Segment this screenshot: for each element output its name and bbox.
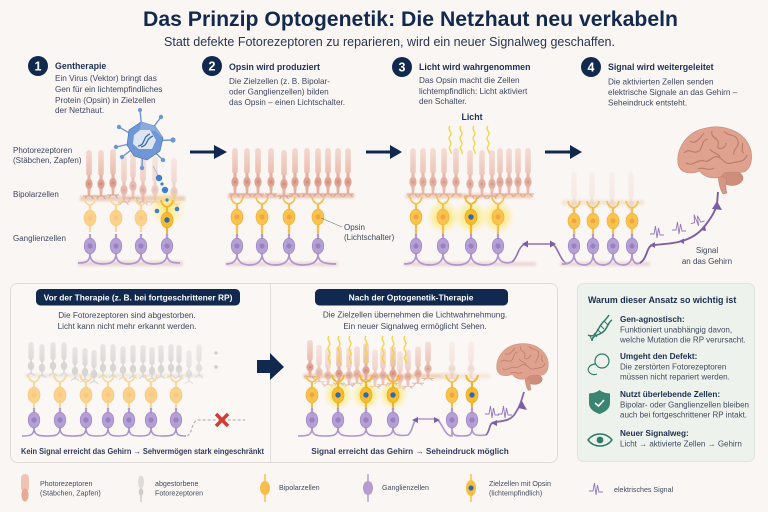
layer labels: Photorezeptoren [13,146,72,155]
retina illustration after therapy [298,340,490,436]
item text: Funktioniert unabhängig davon, [620,326,732,334]
legend: bipolar cells: Bipolarzellen [279,484,320,492]
item text: Bipolar- oder Ganglienzellen bleiben [620,400,749,410]
after heading badge: Nach der Optogenetik-Therapie [349,292,474,302]
step 1 text: Ein Virus (Vektor) bringt das [55,74,157,83]
layer labels: Bipolarzellen [13,190,59,199]
before text: Licht kann nicht mehr erkannt werden. [58,322,196,331]
icon: red cross [216,414,228,426]
step 1 text: Gen für ein lichtempfindliches [55,85,162,94]
step 2 text: oder Ganglienzellen) bilden [229,88,329,96]
opsin callout: Opsin [344,223,365,232]
icon: brain after [497,344,548,390]
number badge 3 [392,57,412,77]
retina illustration step 3 [404,148,536,266]
step 1 text: Protein (Opsin) in Zielzellen [55,96,156,105]
step 3 heading: Licht wird wahrgenommen [419,62,530,72]
panel: why this approach matters [578,284,754,462]
number badge 2 [202,56,222,76]
before heading badge: Vor der Therapie (z. B. bei fortgeschrittener RP) [44,292,233,302]
number badge 2: 2 [209,60,216,74]
icon: virus vector [114,108,176,170]
step 1 text: der Netzhaut. [55,106,104,115]
legend: ganglion cells: Ganglienzellen [382,484,429,492]
step 4 text: Die aktivierten Zellen senden [608,78,714,86]
light rays after [328,336,406,364]
step 2 text: das Opsin – einen Lichtschalter. [229,98,345,107]
after text: Ein neuer Signalweg ermöglicht Sehen. [343,322,487,331]
icon: brain [678,127,752,194]
legend: bipolar cells [260,474,320,502]
arrow before to after [257,353,284,380]
panel: before therapy [21,289,264,456]
signal arrow to brain [640,192,722,263]
step 1 heading: Gentherapie [55,61,106,71]
layer labels: (Stäbchen, Zapfen) [13,156,82,165]
retina illustration step 4 [560,172,650,266]
retina illustration before therapy [22,342,218,436]
legend: ganglion cells [363,474,429,502]
legend: target cells with opsin: Zielzellen mit Opsin [489,480,551,488]
item text: Gen-agnostisch: [620,315,685,324]
step 3 text [419,76,528,106]
before text: Die Fotorezeptoren sind abgestorben. [58,311,196,320]
light rays [449,126,489,154]
before text [58,311,196,331]
signal label: an das Gehirn [682,257,732,266]
number badge 1 [28,56,48,76]
item text [620,352,730,382]
number badge 3: 3 [399,60,406,74]
item text [620,429,742,448]
legend: dead photoreceptors [138,476,203,502]
item text: Neuer Signalweg: [620,429,689,438]
after heading badge [315,289,508,306]
electrical signals [650,212,705,238]
blocked signal line [187,420,245,436]
legend: photoreceptors: (Stäbchen, Zapfen) [40,490,101,498]
step 4 text: Seheindruck entsteht. [608,98,687,108]
step 2 text: Die Zielzellen (z. B. Bipolar- [229,77,330,86]
panel heading: Warum dieser Ansatz so wichtig ist [588,295,736,305]
item text: Die zerstörten Fotorezeptoren [620,362,726,372]
item text: Licht → aktivierte Zellen → Gehirn [620,440,742,448]
retina illustration step 2 [226,148,354,266]
number badge 4 [581,57,601,77]
icon: shield [589,390,610,414]
arrow 1 to 2 [190,145,227,159]
signal label [682,246,732,266]
light label: Licht [461,112,483,122]
number badge 1: 1 [35,60,42,74]
icon: bypass loop [588,354,609,375]
signal label: Signal [696,246,718,255]
arrow 2 to 3 [366,145,402,159]
signal connector [512,240,568,264]
item: bypass defect [588,352,730,382]
after caption: Signal erreicht das Gehirn → Seheindruck möglich [311,447,509,456]
title: Das Prinzip Optogenetik: Die Netzhaut neu verkabeln [143,7,678,31]
legend: photoreceptors [21,474,101,502]
icon: gene particles [153,166,179,213]
before heading badge [36,289,240,306]
signal arrow to brain after [485,392,527,435]
legend: target cells with opsin: (lichtempfindlich) [489,490,542,498]
panel: before and after comparison [10,284,558,462]
step 4 text [608,78,738,108]
item text: welche Mutation die RP verursacht. [619,336,746,344]
item: new signal path [588,429,742,448]
item text: müssen nicht repariert werden. [620,372,730,382]
opsin callout: (Lichtschalter) [344,233,395,242]
layer labels [13,146,82,243]
before caption: Kein Signal erreicht das Gehirn → Sehvermögen stark eingeschränkt [21,447,264,456]
panel: step 4 Signal [560,57,752,266]
step 1 text [55,74,162,115]
panel: after therapy [298,289,548,456]
item text [620,390,749,420]
legend: photoreceptors: Photorezeptoren [40,480,93,488]
legend: dead photoreceptors: Fotorezeptoren [155,490,203,498]
legend: electrical signal [589,483,674,495]
legend [21,474,674,502]
panel: step 1 Gentherapie [28,56,186,266]
panel: step 3 Licht [392,57,568,266]
icon: eye [588,434,612,446]
item: gene agnostic [588,315,746,344]
icon: DNA [588,315,612,341]
item text [619,315,746,344]
step 3 text: Das Opsin macht die Zellen [419,76,520,85]
arrow 3 to 4 [545,145,582,159]
item text: Nutzt überlebende Zellen: [620,390,720,399]
legend: dead photoreceptors: abgestorbene [155,480,198,488]
after text [323,310,507,331]
step 2 text [229,77,345,107]
subtitle: Statt defekte Fotorezeptoren zu reparieren, wird ein neuer Signalweg geschaffen. [164,34,615,49]
number badge 4: 4 [588,60,595,74]
layer labels: Ganglienzellen [13,234,66,243]
step 4 text: elektrische Signale an das Gehirn – [608,88,738,97]
item text: Umgeht den Defekt: [620,352,697,361]
after text: Die Zielzellen übernehmen die Lichtwahrnehmung. [323,310,507,320]
step 3 text: lichtempfindlich: Licht aktiviert [419,87,528,96]
item text: auch bei fortgeschrittener RP intakt. [620,410,747,420]
legend: electrical signal: elektrisches Signal [614,486,674,494]
item: surviving cells [589,390,749,420]
panel: step 2 Opsin [202,56,395,266]
legend: target cells with opsin [466,474,551,502]
opsin callout [321,218,395,242]
step 2 heading: Opsin wird produziert [229,62,320,72]
step 4 heading: Signal wird weitergeleitet [608,62,714,72]
step 3 text: den Schalter. [419,97,467,106]
retina illustration step 1 [78,149,186,266]
